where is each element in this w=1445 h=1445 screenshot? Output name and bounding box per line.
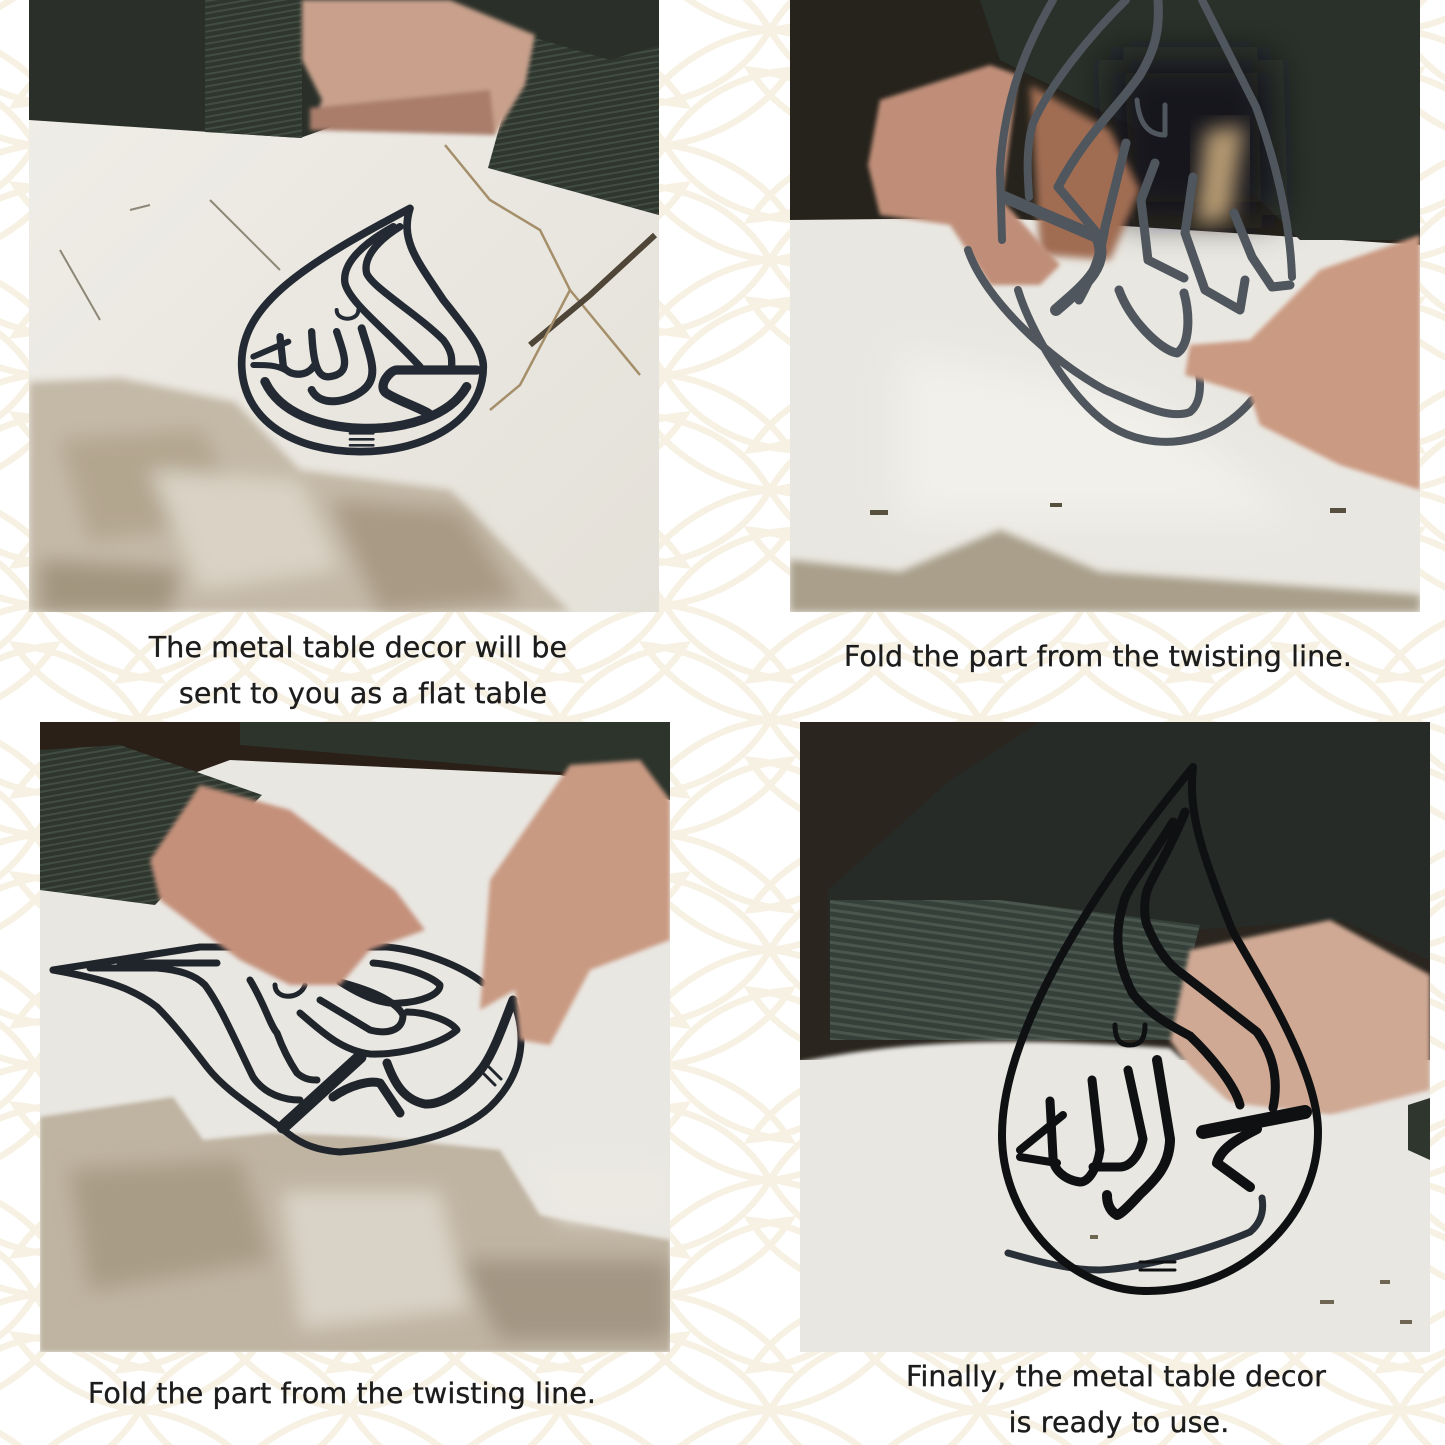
stone bbox=[40, 1097, 670, 1352]
marble highlight bbox=[921, 382, 1212, 498]
sweater and arms bbox=[29, 0, 659, 215]
standing teardrop bbox=[1002, 767, 1318, 1291]
caption: step 2: Fold the part from the twisting line. bbox=[844, 640, 1352, 673]
stone strip bbox=[790, 530, 1420, 612]
hands bbox=[150, 760, 670, 1045]
left hand bbox=[868, 65, 1060, 285]
hand on table bbox=[1170, 920, 1430, 1115]
sweater bbox=[980, 0, 1420, 240]
caption: step 4: Finally, the metal table decor bbox=[906, 1360, 1326, 1393]
panel: step 3 photo bbox=[40, 722, 670, 1352]
teardrop held up bbox=[968, 0, 1292, 442]
teardrop calligraphy flat bbox=[242, 208, 483, 452]
dark background bbox=[790, 0, 1420, 245]
caption: step 1 second line: sent to you as a flat table bbox=[179, 677, 547, 710]
tan object bbox=[1195, 125, 1245, 225]
stone area bbox=[29, 378, 570, 612]
sweater sleeves bbox=[40, 722, 670, 905]
caption: step 1: The metal table decor will be bbox=[148, 631, 567, 664]
marble veins bbox=[60, 145, 655, 410]
marble marks bbox=[870, 503, 1346, 515]
sweater bbox=[830, 900, 1200, 1040]
flat teardrop sideways bbox=[53, 947, 521, 1152]
table bbox=[800, 1038, 1332, 1116]
stone mottling bbox=[40, 430, 520, 612]
marble speckles bbox=[1090, 1235, 1412, 1324]
hands bbox=[302, 0, 535, 135]
panel: step 4 photo bbox=[800, 722, 1430, 1352]
caption: step 3: Fold the part from the twisting line. bbox=[88, 1377, 596, 1410]
black interior behind piece bbox=[1110, 60, 1275, 215]
palm seen through piece bbox=[1030, 85, 1140, 260]
right hand bbox=[1185, 235, 1420, 490]
folded base bbox=[1008, 1198, 1263, 1270]
caption: step 4 second line: is ready to use. bbox=[1009, 1406, 1229, 1439]
panel: step 1 photo bbox=[29, 0, 659, 612]
stone mottling bbox=[70, 1160, 670, 1340]
panel: step 2 photo bbox=[790, 0, 1420, 612]
right cuff bbox=[1408, 1098, 1430, 1160]
